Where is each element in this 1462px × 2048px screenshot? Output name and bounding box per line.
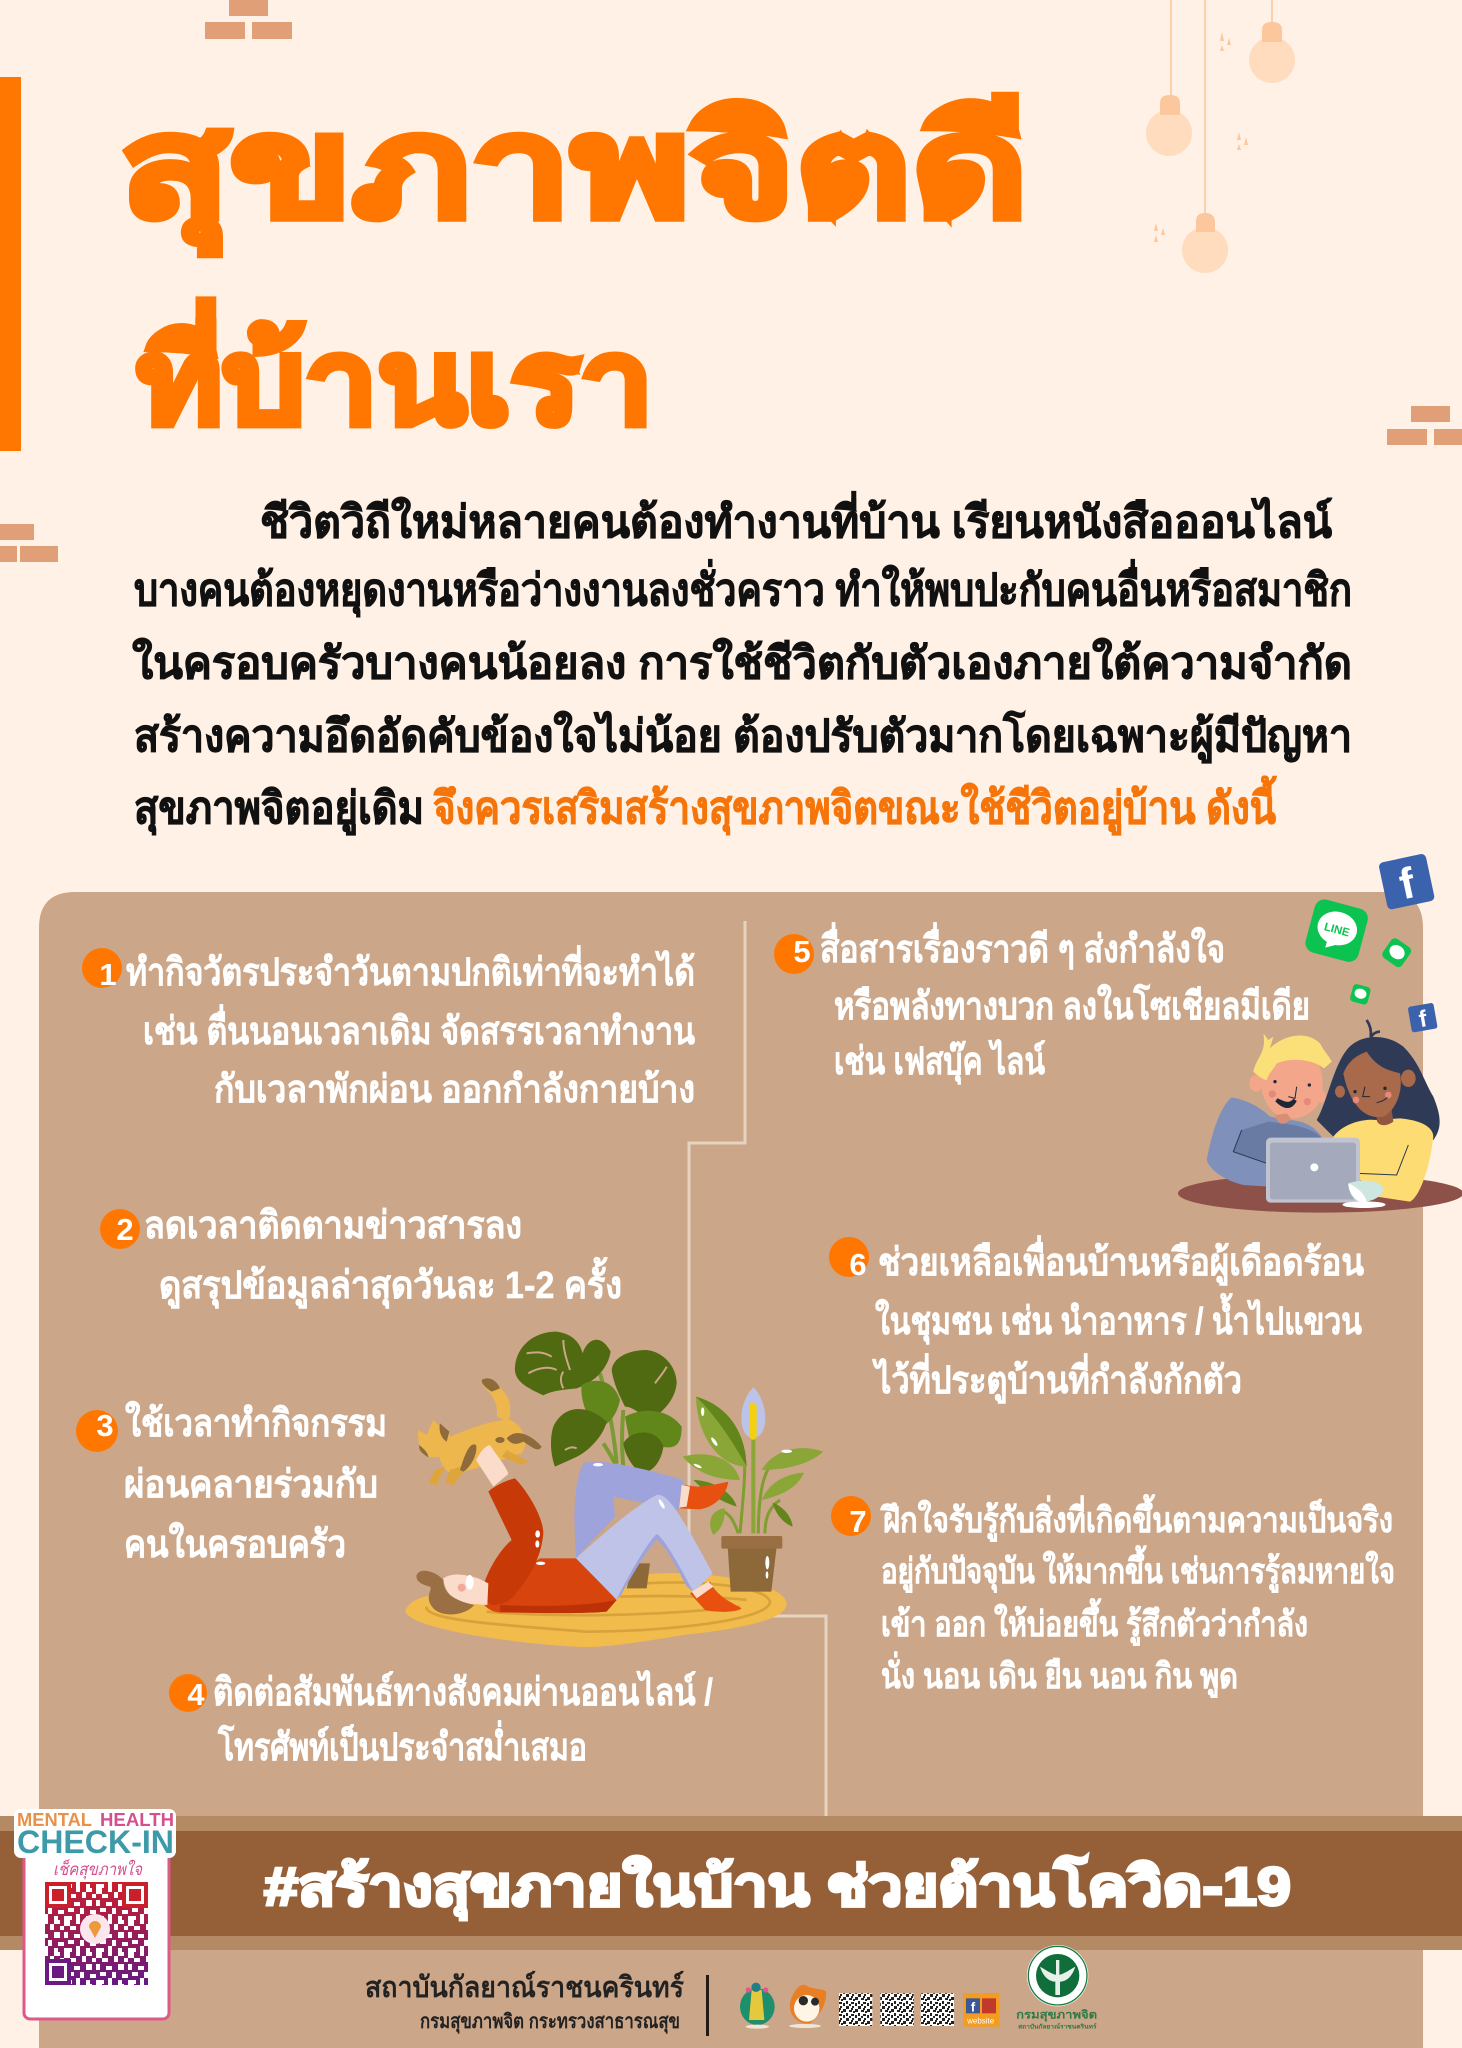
coffee cup — [1342, 1181, 1386, 1208]
mental health check-in card — [14, 1809, 176, 2019]
icon: facebook large — [1378, 853, 1436, 913]
organisation text: สถาบันกัลยาณ์ราชนครินทร์ — [365, 1970, 684, 2004]
owl mascot — [789, 1985, 826, 2028]
illustration: person on rug with cat and plants — [405, 1332, 823, 1647]
ministry logo: สถาบันกัลยาณ์ราชนครินทร์ — [1018, 2022, 1097, 2030]
item 7: นั่ง นอน เดิน ยืน นอน กิน พูด — [881, 1651, 1238, 1698]
panel divider lines — [689, 921, 826, 1816]
mental health check-in card: เช็คสุขภาพใจ — [53, 1859, 143, 1880]
icon: line small — [1380, 936, 1413, 969]
woman — [1317, 1020, 1440, 1202]
intro paragraph: จึงควรเสริมสร้างสุขภาพจิตขณะใช้ชีวิตอยู่บ้าน ดังนี้ — [433, 775, 1277, 836]
decorative bricks left — [0, 524, 58, 562]
item 6 — [829, 1235, 1364, 1404]
mental health check-in card: CHECK-IN — [17, 1824, 174, 1860]
rug — [405, 1573, 787, 1647]
table — [1178, 1174, 1462, 1213]
title: สุขภาพจิตดี — [120, 89, 1028, 255]
item 4: โทรศัพท์เป็นประจำสม่ำเสมอ — [217, 1720, 587, 1769]
item 6: ช่วยเหลือเพื่อนบ้านหรือผู้เดือดร้อน — [878, 1235, 1364, 1286]
decorative bricks right — [1387, 406, 1462, 445]
item 1: ทำกิจวัตรประจำวันตามปกติเท่าที่จะทำได้ — [126, 945, 695, 994]
item 5: สื่อสารเรื่องราวดี ๆ ส่งกำลังใจ — [820, 922, 1225, 971]
hashtag banner — [0, 1816, 1462, 1950]
website badge — [963, 1993, 999, 2027]
item 3 — [76, 1401, 387, 1566]
item 3: 3 — [96, 1408, 114, 1443]
item 6: ไว้ที่ประตูบ้านที่กำลังกักตัว — [872, 1353, 1242, 1404]
item 6: 6 — [849, 1247, 867, 1282]
item 4 — [169, 1670, 713, 1769]
peacock mascot — [740, 1983, 775, 2029]
footer logos — [740, 1945, 1097, 2030]
title — [120, 89, 1028, 449]
item 2: 2 — [116, 1212, 134, 1247]
item 1: เช่น ตื่นนอนเวลาเดิม จัดสรรเวลาทำงาน — [143, 1004, 695, 1053]
icon: line large: LINE — [1323, 921, 1351, 940]
icon: line large — [1303, 897, 1370, 964]
item 4: 4 — [187, 1677, 205, 1712]
cat — [418, 1378, 542, 1485]
main tan panel — [39, 892, 1423, 2048]
monstera plant — [515, 1332, 682, 1473]
item 2: ดูสรุปข้อมูลล่าสุดวันละ 1-2 ครั้ง — [159, 1257, 622, 1309]
item 2 — [100, 1205, 622, 1309]
peace lily — [683, 1387, 823, 1535]
ministry logo: กรมสุขภาพจิต — [1016, 2008, 1097, 2022]
illustration: couple with laptop and social icons — [1178, 853, 1462, 1213]
man — [1207, 1033, 1332, 1190]
organisation text — [365, 1970, 684, 2034]
item 1: กับเวลาพักผ่อน ออกกำลังกายบ้าง — [214, 1069, 695, 1111]
decorative bricks top left — [205, 0, 292, 39]
hanging light bulbs — [1146, 0, 1295, 273]
icon: facebook small: f — [1417, 1005, 1429, 1032]
ministry logo — [1016, 1945, 1097, 2030]
item 7 — [831, 1494, 1395, 1698]
organisation text: กรมสุขภาพจิต กระทรวงสาธารณสุข — [420, 2011, 680, 2034]
person — [416, 1445, 742, 1614]
website badge: f — [971, 2000, 976, 2015]
title: ที่บ้านเรา — [137, 300, 653, 449]
plant pot — [627, 1536, 782, 1592]
mental health check-in card: HEALTH — [100, 1810, 174, 1830]
item 1 — [82, 945, 695, 1111]
item 3: คนในครอบครัว — [124, 1522, 346, 1566]
item 1: 1 — [99, 957, 117, 992]
item 7: 7 — [849, 1504, 867, 1539]
intro paragraph — [132, 491, 1352, 836]
intro paragraph: ในครอบครัวบางคนน้อยลง การใช้ชีวิตกับตัวเองภายใต้ความจำกัด — [132, 637, 1352, 688]
icon: facebook small — [1408, 1003, 1438, 1034]
item 3: ใช้เวลาทำกิจกรรม — [125, 1401, 387, 1445]
intro paragraph: สุขภาพจิตอยู่เดิม — [134, 784, 424, 836]
item 5: 5 — [793, 934, 811, 969]
item 2: ลดเวลาติดตามข่าวสารลง — [144, 1205, 522, 1247]
icon: facebook large: f — [1395, 859, 1420, 909]
QR code — [45, 1882, 148, 1985]
item 5: หรือพลังทางบวก ลงในโซเชียลมีเดีย — [834, 983, 1310, 1028]
website badge: website — [966, 2016, 995, 2025]
item 4: ติดต่อสัมพันธ์ทางสังคมผ่านออนไลน์ / — [213, 1670, 713, 1714]
item 3: ผ่อนคลายร่วมกับ — [124, 1464, 378, 1506]
item 7: เข้า ออก ให้บ่อยขึ้น รู้สึกตัวว่ากำลัง — [881, 1598, 1308, 1646]
orange side bar — [0, 77, 21, 451]
intro paragraph: สร้างความอึดอัดคับข้องใจไม่น้อย ต้องปรับตัวมากโดยเฉพาะผู้มีปัญหา — [134, 709, 1352, 763]
laptop — [1266, 1138, 1360, 1203]
icon: line tiny — [1349, 983, 1371, 1005]
hashtag banner: #สร้างสุขภายในบ้าน ช่วยต้านโควิด-19 — [264, 1855, 1291, 1921]
intro paragraph: ชีวิตวิถีใหม่หลายคนต้องทำงานที่บ้าน เรียนหนังสือออนไลน์ — [260, 491, 1332, 547]
item 5: เช่น เฟสบุ๊ค ไลน์ — [834, 1039, 1045, 1085]
item 5 — [774, 922, 1310, 1085]
small QR codes — [839, 1993, 954, 2026]
mental health check-in card: MENTAL — [17, 1810, 92, 1830]
